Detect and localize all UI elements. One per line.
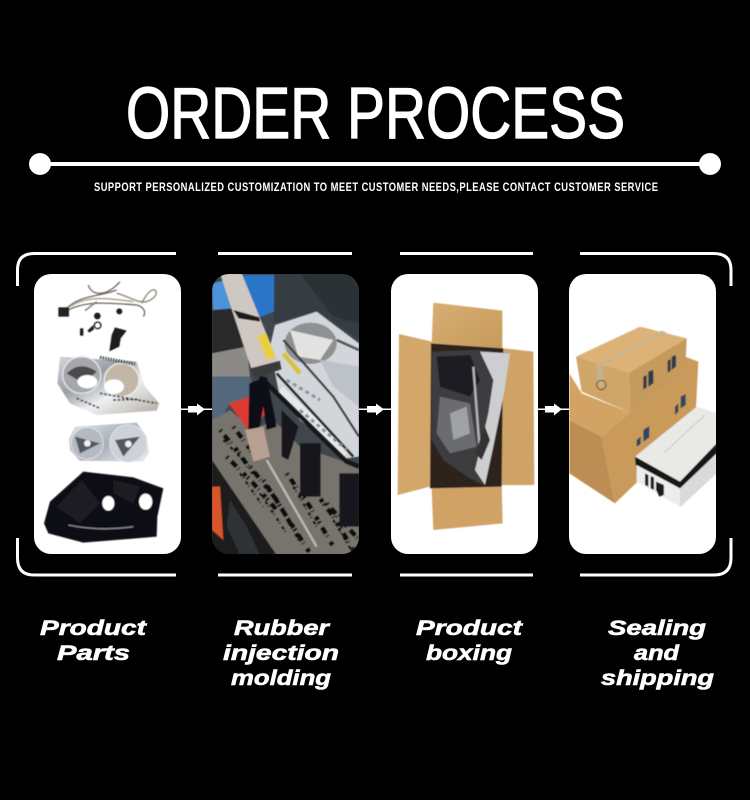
bracket frame	[18, 254, 731, 575]
label: rubber injection molding: molding	[231, 667, 331, 690]
label: product boxing	[416, 617, 523, 665]
headlamp in bubble wrap	[432, 350, 510, 485]
workshop backdrop	[212, 273, 360, 420]
panel: product boxing photo	[391, 274, 538, 554]
arrow: boxing to shipping	[538, 404, 569, 416]
small connectors and clips	[80, 308, 127, 351]
table supports	[282, 410, 359, 527]
white box	[635, 407, 717, 507]
injection nozzle	[220, 273, 282, 462]
label: product boxing: Product	[416, 617, 523, 640]
panel: sealing and shipping photo	[569, 274, 717, 554]
small taped box	[576, 327, 687, 413]
black housing	[44, 472, 163, 543]
label: product parts	[40, 617, 147, 665]
label: sealing and shipping	[601, 617, 714, 690]
metal work table	[212, 410, 359, 555]
wiring harness	[58, 282, 156, 317]
label: sealing and shipping: Sealing	[608, 617, 706, 640]
label: rubber injection molding: Rubber	[234, 617, 331, 640]
arrow: molding to boxing	[359, 404, 391, 416]
red tray	[228, 396, 266, 430]
arrow: parts to molding	[181, 404, 212, 416]
label: sealing and shipping: shipping	[601, 667, 714, 690]
chrome reflector	[69, 423, 149, 462]
large cardboard box	[569, 357, 698, 503]
open cardboard box flaps	[398, 303, 534, 530]
title: ORDER PROCESS	[126, 74, 625, 154]
chrome headlamp reflector	[260, 312, 359, 467]
label: product parts: Product	[40, 617, 147, 640]
label: rubber injection molding: injection	[223, 642, 339, 665]
label: product boxing: boxing	[426, 642, 512, 665]
panel: product parts photo	[34, 274, 181, 554]
chrome bezel	[57, 357, 159, 415]
panel: rubber injection molding photo	[212, 273, 360, 555]
subtitle: SUPPORT PERSONALIZED CUSTOMIZATION TO MEET CUSTOMER NEEDS,PLEASE CONTACT CUSTOMER SERVICE	[94, 181, 658, 194]
label: rubber injection molding	[223, 617, 339, 690]
title divider with end dots	[29, 153, 721, 175]
label: sealing and shipping: and	[634, 642, 680, 665]
label: product parts: Parts	[57, 642, 130, 665]
box interior	[430, 343, 503, 488]
